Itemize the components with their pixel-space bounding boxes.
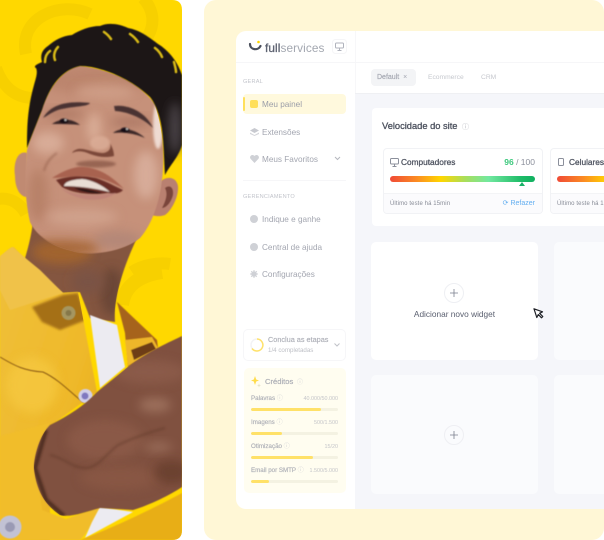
left collar [0,247,63,310]
icon: logo smile [248,40,262,50]
icon: panel [250,100,258,108]
back of hand tone [72,424,138,456]
card: empty widget bottom [371,375,538,494]
knuckle highlight [139,398,171,412]
face [20,66,163,256]
panel: app window [236,31,604,509]
menu item: indique e ganhe [250,215,321,224]
last test text: Último teste há 15min [390,201,450,207]
label: Celulares [569,157,604,167]
icon: help [250,243,258,251]
icon: progress ring [250,338,264,352]
decorative background arcs [136,266,162,274]
tabs bar [355,31,604,93]
tab: ecommerce: Ecommerce [428,74,464,81]
footer [384,193,542,214]
icon: layers [250,128,259,136]
card: empty widget bottom right [554,375,604,494]
stitch line [0,357,84,403]
tab: crm: CRM [481,74,496,81]
logo wordmark: fullservices [265,41,325,55]
icon: mouse cursor [533,308,544,318]
jaw right tone [94,231,142,249]
chest highlight [10,360,58,412]
eyebrows [43,102,90,118]
label: Extensões [262,128,300,137]
label: Email por SMTP ⓘ [251,467,304,474]
right eye [113,128,145,138]
value: 500/1.500 [314,420,338,426]
label: Central de ajuda [262,243,322,252]
menu item: meus favoritos [250,155,340,164]
score gradient bar [557,176,604,182]
panel: dashboard content [355,93,604,509]
label: Meu painel [262,100,302,109]
button: chest [78,389,92,403]
heading: Velocidade do site ⓘ [382,121,469,131]
label: Meus Favoritos [262,155,318,164]
icon: heart [250,155,259,163]
button: collar [62,306,76,320]
score gradient bar [390,176,535,182]
menu item: extensões [250,128,300,137]
row: otimização [251,442,338,459]
tab: default: Default × [377,74,407,81]
icon: monitor button [332,39,347,54]
neck [20,222,137,322]
shirt [90,315,125,388]
left cheek highlight [32,132,64,154]
value: 1.500/5.000 [310,468,338,474]
mouth [52,167,124,200]
label: Imagens ⓘ [251,419,283,426]
lower shirt [85,507,133,538]
row: email por smtp [251,466,338,483]
label: Otimização ⓘ [251,443,290,450]
active marker [243,97,245,111]
score: 96 / 100 [504,157,535,167]
progress bar [251,408,338,411]
top bar divider [236,62,604,63]
nose [72,136,116,168]
menu item: meu painel (active) [243,94,346,114]
panel: pale yellow backdrop [204,0,604,540]
icon: phone [558,158,564,166]
right cheek highlight [134,151,158,199]
button: cuff [0,516,22,538]
sublabel: 1/4 completadas [268,347,313,354]
lower right shadow [154,460,190,484]
redo link: ⟳ Refazer [503,200,535,207]
forehead tone [51,66,140,91]
foreground sleeve [80,493,182,540]
label: Configurações [262,270,315,279]
icon: coin [250,215,258,223]
finger highlight [144,442,172,452]
yellow strand highlights [45,32,176,72]
icon: chevron [334,343,340,346]
right collar [117,302,158,367]
card: desktop score [383,148,543,214]
progress bar [251,432,338,435]
card: mobile score [550,148,604,214]
left eye [52,118,80,125]
panel: photo of smiling man on yellow [0,0,182,540]
panel: site speed [372,108,604,226]
icon: sparkle [251,376,260,387]
label: Indique e ganhe [262,215,321,224]
icon: gear [250,270,258,278]
jacket body [0,247,100,540]
ears [15,153,178,216]
right temple highlight [153,101,163,149]
icon: chevron [334,156,340,160]
jaw shadow [42,234,102,253]
icon: plus button [444,283,464,303]
value: 15/20 [324,444,338,450]
nose bridge highlight [87,113,101,143]
menu item: central de ajuda [250,243,322,252]
score marker [519,182,525,186]
tendon [50,428,165,468]
menu item: configurações [250,270,315,279]
chin highlight [50,208,113,226]
icon: monitor [390,158,399,167]
tab: default [371,69,416,86]
forehead highlight [75,84,135,100]
row: imagens [251,418,338,435]
card: add widget [371,242,538,360]
row: palavras [251,394,338,411]
smile crease [44,153,57,171]
left cheek tone [28,169,48,221]
logo [248,40,325,55]
icon: plus button [444,425,464,445]
footer [551,193,604,214]
label: Computadores [401,157,455,167]
sleeve [0,423,100,540]
heading: Créditos ⓘ [265,377,303,386]
hand [34,336,190,516]
knuckle tone [116,362,182,380]
sidebar heading: geral: GERAL [243,79,263,85]
sidebar divider [243,180,346,181]
eye socket left [44,109,84,119]
value: 40.000/50.000 [304,396,338,402]
sidebar heading: gerenciamento: GERENCIAMENTO [243,194,295,200]
label: Adicionar novo widget [414,309,495,319]
collar shadow [32,293,86,330]
card: empty widget right [554,242,604,360]
label: Conclua as etapas [268,335,328,344]
lower hand tone [80,466,160,490]
grey side of hair [169,102,181,154]
card: steps progress [243,329,346,361]
wrist edge shadow [35,430,64,516]
hair [27,24,182,175]
label: Palavras ⓘ [251,395,283,402]
progress bar [251,480,338,483]
progress bar [251,456,338,459]
panel: credits [244,368,346,493]
eye socket right [110,117,150,127]
